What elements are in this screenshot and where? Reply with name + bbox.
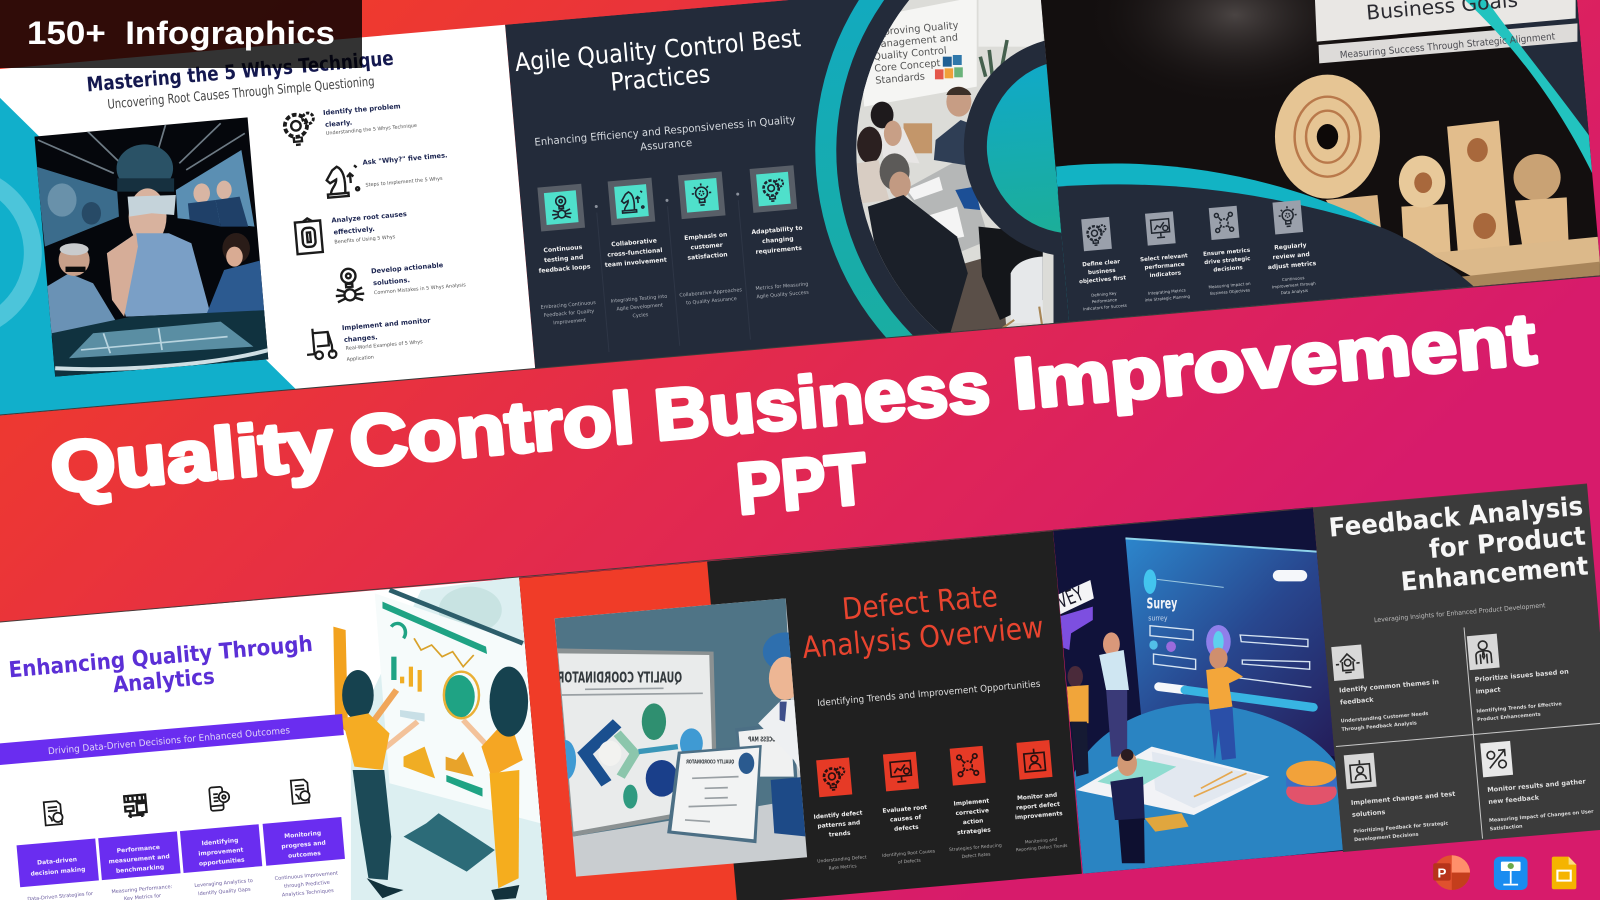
column 3 [940,745,1003,861]
title box [1315,0,1576,42]
column 1: decision making [30,866,86,878]
column 1: business [1088,268,1117,276]
whiteboard text: Core Concept [874,58,941,75]
step 4 [334,259,467,302]
column 4: changing [762,235,794,245]
column 4 [1268,200,1316,294]
banner: 150+ Infographics [0,0,362,68]
slide title [1328,492,1590,604]
column 2: Identifying Root Causes [882,849,935,859]
quadrant 3: Prioritizing Feedback for Strategic [1353,821,1449,835]
whiteboard text: Quality Control [873,45,947,63]
panel: slide Agile Quality Control Best Practices [505,0,1069,368]
column 4: Adaptability to [751,225,803,236]
column 2: Measuring Performance: [111,884,173,895]
slide subtitle: Measuring Success Through Strategic Alignment [1339,31,1556,61]
step 3: Benefits of Using 5 Whys [334,234,396,246]
quadrant 2: Prioritize issues based on [1474,667,1569,684]
slide title [804,586,1042,659]
column 3: Collaborative Approaches [679,287,742,299]
column 4 [745,165,810,300]
sub-title band [0,714,344,765]
column 1: objectives first [1079,275,1127,285]
column 3: decisions [1213,265,1244,274]
slide subtitle: Driving Data-Driven Decisions for Enhanced Outcomes [48,725,291,757]
column 4: Continuous Improvement [274,871,338,882]
panel: slide Enhancing Quality Through Analytics [0,577,547,900]
column 3: Defect Rates [961,852,991,860]
icon: Keynote [1494,857,1528,890]
column 1: testing and [544,254,584,264]
column 1: Rate Metrics [828,863,858,872]
quadrant 2: Identifying Trends for Effective [1476,701,1562,715]
column 4: review and [1272,251,1310,261]
column 1: Performance [1092,297,1118,304]
step 5: Real-World Examples of 5 Whys [345,339,423,352]
panel: slide Feedback Analysis for Product Enhancement [1040,470,1600,900]
column 3: Identify Quality Gaps [198,887,251,897]
column 2: Collaborative [611,237,657,248]
column 3: to Quality Assurance [686,296,737,306]
column 3: strategies [957,828,992,836]
photo: team at futuristic table [31,113,272,380]
column 2 [882,752,935,864]
wooden shapes [1275,75,1600,287]
column 3 [180,786,262,896]
quadrant 3 [1344,746,1459,844]
slide title: Feedback Analysis [1328,492,1584,544]
main title: Business [651,347,993,456]
column 4: Monitor and [1017,793,1058,802]
banner: 150+ Infographics: 150+ Infographics [27,15,335,51]
column 2 [604,178,667,318]
column 4: progress and [281,839,326,850]
column 3: Identifying [201,837,239,847]
step 2 [325,151,450,198]
feedback text panel [1313,484,1600,852]
column 4: Monitoring [284,830,321,840]
column 3 [678,172,742,304]
column 2: Integrating Metrics [1148,288,1186,296]
column 3: drive strategic [1204,256,1251,266]
column 4: outcomes [288,850,322,860]
column 1: trends [829,831,851,839]
quadrant 3: solutions [1352,808,1386,819]
illustration: survey dashboard: surrey [1148,614,1168,623]
quadrant 1: feedback [1340,696,1375,706]
whiteboard text: Standards [875,71,925,87]
column 2: defects [894,825,919,833]
step 3: Analyze root causes [331,210,407,225]
column 4: Improvement through [1272,281,1316,289]
column 2: indicators [1149,270,1182,279]
column 2: cross-functional [607,247,663,259]
step 5: Implement and monitor [342,316,431,332]
column 2 [95,792,183,900]
step 1 [284,101,418,146]
main title: PPT [733,439,870,530]
main title [47,299,1539,530]
column 4: Reporting Defect Trends [1016,843,1068,853]
illustration: survey dashboard: VEY [1053,582,1087,613]
column 1: Defining Key [1091,291,1117,298]
column 1: Identify defect [813,811,863,821]
slide title [516,29,801,90]
column 1: Understanding Defect [817,855,867,865]
step 2: Steps to Implement the 5 Whys [365,176,443,189]
photo: quality coordinator with certificates: QUALITY COORDINATOR [557,668,682,687]
column 3: corrective [955,808,989,817]
column 1: feedback loops [538,263,591,275]
column 3: improvement [198,847,244,858]
quadrant 2: impact [1475,685,1501,696]
quadrant 2 [1467,628,1573,723]
column 1 [814,758,866,870]
column 2: Agile Development [616,302,663,312]
column 1 [1079,216,1127,310]
column 4: Regularly [1274,242,1307,252]
panel: slide Mastering the 5 Whys Technique [0,0,535,425]
slide title: Analysis Overview [801,610,1045,666]
column 3: customer [690,242,723,251]
slide title: Mastering the 5 Whys Technique [86,46,395,96]
slide title: Defect Rate [841,579,999,627]
subtitle band [1319,23,1577,63]
step 4: solutions. [373,276,410,287]
photo: quality coordinator with certificates: QUALITY COORDINATOR [686,759,734,765]
icon: PowerPoint: P [1438,866,1447,880]
column 4: Monitoring and [1025,838,1057,846]
dividers [595,193,739,208]
app icons [1433,855,1576,890]
slide title: Practices [609,59,711,97]
whiteboard text: Management and [872,32,959,51]
column 2: measurement and [108,853,170,865]
column 3: opportunities [199,857,245,868]
column 3: Emphasis on [684,231,728,242]
column 4: improvements [1015,811,1063,821]
column 1: Feedback for Quality [544,308,595,319]
step 5: Application [346,355,374,363]
slide title: Analytics [112,665,216,698]
illustration: analysts at monitor [333,577,547,900]
column 3 [1203,206,1250,295]
column 1 [538,184,596,325]
column 1: Data-driven [37,856,77,867]
column 2: Cycles [632,312,649,319]
photo: business meeting [856,0,1054,333]
quadrant 1 [1331,638,1443,733]
illustration: survey dashboard [1040,470,1360,900]
column 2: Performance [116,844,160,855]
column 2 [1140,211,1190,302]
quadrant 1: Identify common themes in [1339,678,1439,695]
column 2: Integrating Testing into [610,294,668,305]
column 4: Analytics Techniques [282,888,334,898]
step 3: effectively. [333,225,375,237]
column 3: Strategies for Reducing [949,844,1002,853]
photo: quality coordinator with certificates [554,598,808,877]
column 3: Ensure metrics [1203,248,1250,258]
quadrant 4: Monitor results and gather [1487,777,1586,794]
slide title: Enhancing Quality Through [8,632,314,683]
icon: Google Slides [1552,857,1576,889]
column 1: Continuous [543,244,582,254]
slide subtitle: Uncovering Root Causes Through Simple Questioning [107,74,375,113]
column 2: causes of [890,815,922,824]
step 2: Ask "Why?" five times. [362,151,448,167]
column 4: Continuous [1282,275,1305,282]
quadrant 1: Understanding Customer Needs [1341,711,1429,725]
quadrant 4: Measuring Impact of Changes on User [1489,809,1594,824]
main title: Improvement [1010,299,1539,425]
quadrant 2: Product Enhancements [1477,712,1541,723]
slide title: Agile Quality Control Best [514,23,802,77]
photo: quality coordinator with certificates: PROCESS MAP [748,735,782,744]
slide subtitle: Leveraging Insights for Enhanced Product Development [1374,601,1546,624]
column 3: Measuring Impact on [1208,281,1251,289]
teal swoosh [1465,0,1597,183]
column 1: Embracing Continuous [540,300,596,311]
column 1 [13,798,100,900]
whiteboard text: Improving Quality [871,20,959,39]
icon: PowerPoint [1433,855,1470,890]
column 4 [1007,739,1068,853]
navy corner [1504,0,1592,162]
column 2: of Defects [898,858,922,866]
column 2: into Strategic Planning [1145,294,1191,303]
column 1: Improvement [553,317,586,326]
illustration: survey dashboard: Surey [1146,594,1177,612]
navy and teal wave [1056,163,1474,330]
quadrant 4: new feedback [1488,793,1540,806]
step 3 [295,210,409,254]
main title: Control [346,378,637,483]
step 1: clearly. [325,119,353,129]
step 1: Understanding the 5 Whys Technique [326,123,417,137]
column 1: Indicators for Success [1083,303,1127,312]
column 2: team involvement [605,257,667,269]
panel: slide Business Goals [1030,0,1600,330]
slide title: for Product [1428,522,1587,565]
column 1: patterns and [817,820,861,830]
column 4: Agile Quality Success [756,290,810,300]
column 2: Select relevant [1140,253,1188,263]
slide title: Enhancement [1400,551,1590,598]
column 2: Evaluate root [882,805,927,815]
column 4 [262,778,345,896]
quadrant 1: Through Feedback Analysis [1341,720,1417,733]
quadrant 4 [1480,734,1595,833]
column 4: adjust metrics [1268,260,1317,271]
slide subtitle: Assurance [640,137,693,153]
main title: Quality [47,405,336,509]
slide subtitle: Enhancing Efficiency and Responsiveness in Quality [534,114,796,149]
column 3: Business Objectives [1210,287,1250,296]
panel: slide Defect Rate Analysis Overview [519,531,1082,900]
step 1: Identify the problem [323,102,401,117]
column 3: action [963,818,984,826]
column 2: benchmarking [116,864,164,875]
column 1: Define clear [1082,259,1120,268]
step 4: Common Mistakes in 5 Whys Analysis [374,282,466,296]
column 4: requirements [755,245,803,256]
step 5: changes. [344,333,378,344]
column 2: performance [1144,262,1185,271]
column 3: satisfaction [687,251,728,262]
column 4: through Predictive [284,880,330,890]
column 4: Metrics for Measuring [755,281,809,292]
column 3: Leveraging Analytics to [194,878,253,889]
column 4: Data Analysis [1280,288,1308,295]
slide subtitle: Identifying Trends and Improvement Opportunities [817,679,1041,709]
quadrant 3: Implement changes and test [1351,790,1456,807]
quadrant 3: Development Decisions [1354,832,1419,843]
column 4: report defect [1016,802,1060,812]
step 4: Develop actionable [371,261,444,275]
step 5 [305,316,434,366]
column 3: Implement [953,798,990,808]
quadrant 4: Satisfaction [1489,824,1523,832]
